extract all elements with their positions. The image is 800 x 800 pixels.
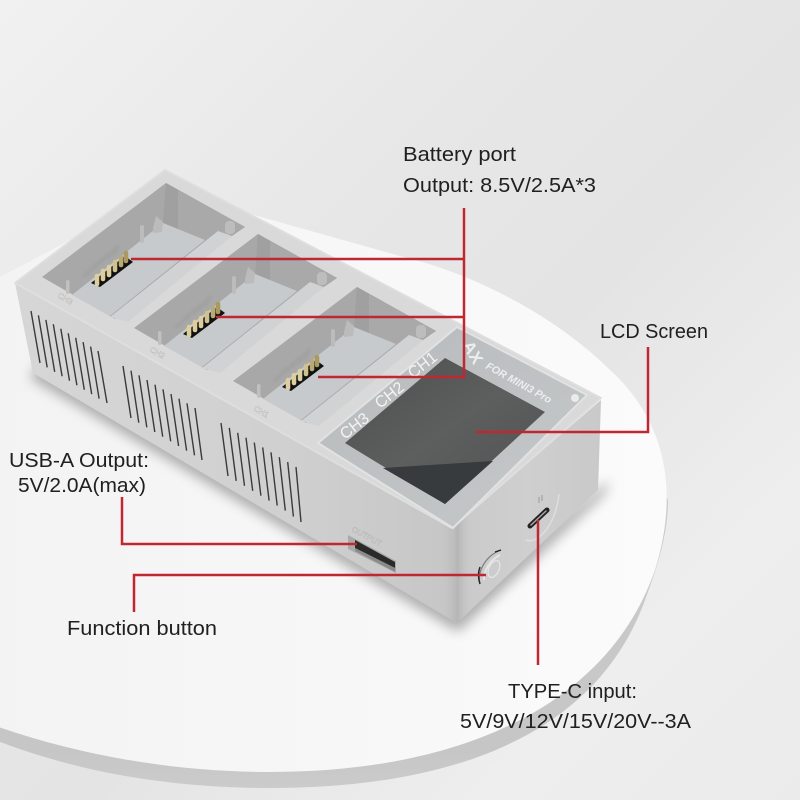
slot labels: CH2 (148, 345, 167, 361)
LCD screen (345, 358, 545, 504)
left side face (15, 283, 457, 623)
LCD channel labels (337, 349, 441, 443)
callout line: LCD (476, 347, 648, 432)
slot labels: CH3 (56, 291, 75, 307)
slot CH1 (233, 287, 436, 426)
LCD reflection (383, 461, 493, 504)
label: Type-C input: 5V/9V/12V/15V/20V--3A (460, 710, 691, 733)
label: battery port (403, 143, 596, 197)
rounded front corner (440, 514, 472, 623)
callout line: USB-A (122, 497, 357, 544)
slot labels: CH1 (252, 404, 271, 420)
slot labels (56, 291, 271, 420)
slot CH3 (42, 183, 245, 322)
slot CH2 (134, 234, 337, 373)
LCD channel labels: CH1 (405, 349, 441, 382)
label: USB-A output: USB-A Output: (9, 449, 149, 472)
label: battery port: Output: 8.5V/2.5A*3 (403, 174, 596, 197)
disc platform (0, 190, 667, 772)
vent group 2 (123, 366, 202, 460)
label: function button: Function button (67, 617, 217, 640)
label: Type-C input (460, 680, 691, 733)
LCD bezel (318, 327, 587, 528)
disc platform edge (0, 300, 668, 788)
vent group 3 (221, 423, 301, 522)
callout lines: battery port (131, 208, 465, 378)
logo on bezel: AX (459, 338, 487, 368)
callout line: function button (134, 575, 486, 612)
LCD channel labels: CH3 (337, 410, 373, 443)
USB-A port: OUTPUT (350, 525, 383, 548)
model text: FOR MINI3 Pro (484, 360, 554, 407)
label: USB-A output: 5V/2.0A(max) (18, 474, 146, 497)
USB-A port (348, 525, 396, 573)
function button (478, 550, 502, 584)
LCD channel labels: CH2 (372, 379, 408, 412)
top surface (15, 170, 601, 528)
device shadow (30, 362, 610, 632)
right side face (452, 400, 601, 623)
vent group 1 (31, 311, 107, 403)
charging hub device (15, 170, 601, 623)
label: USB-A output (9, 449, 149, 497)
label: Type-C input: TYPE-C input: (508, 680, 637, 703)
callout line: Type-C (537, 520, 539, 665)
label: LCD screen: LCD Screen (600, 320, 708, 343)
label: battery port: Battery port (403, 143, 516, 166)
small indicator (571, 394, 579, 402)
USB-C port (526, 494, 559, 541)
